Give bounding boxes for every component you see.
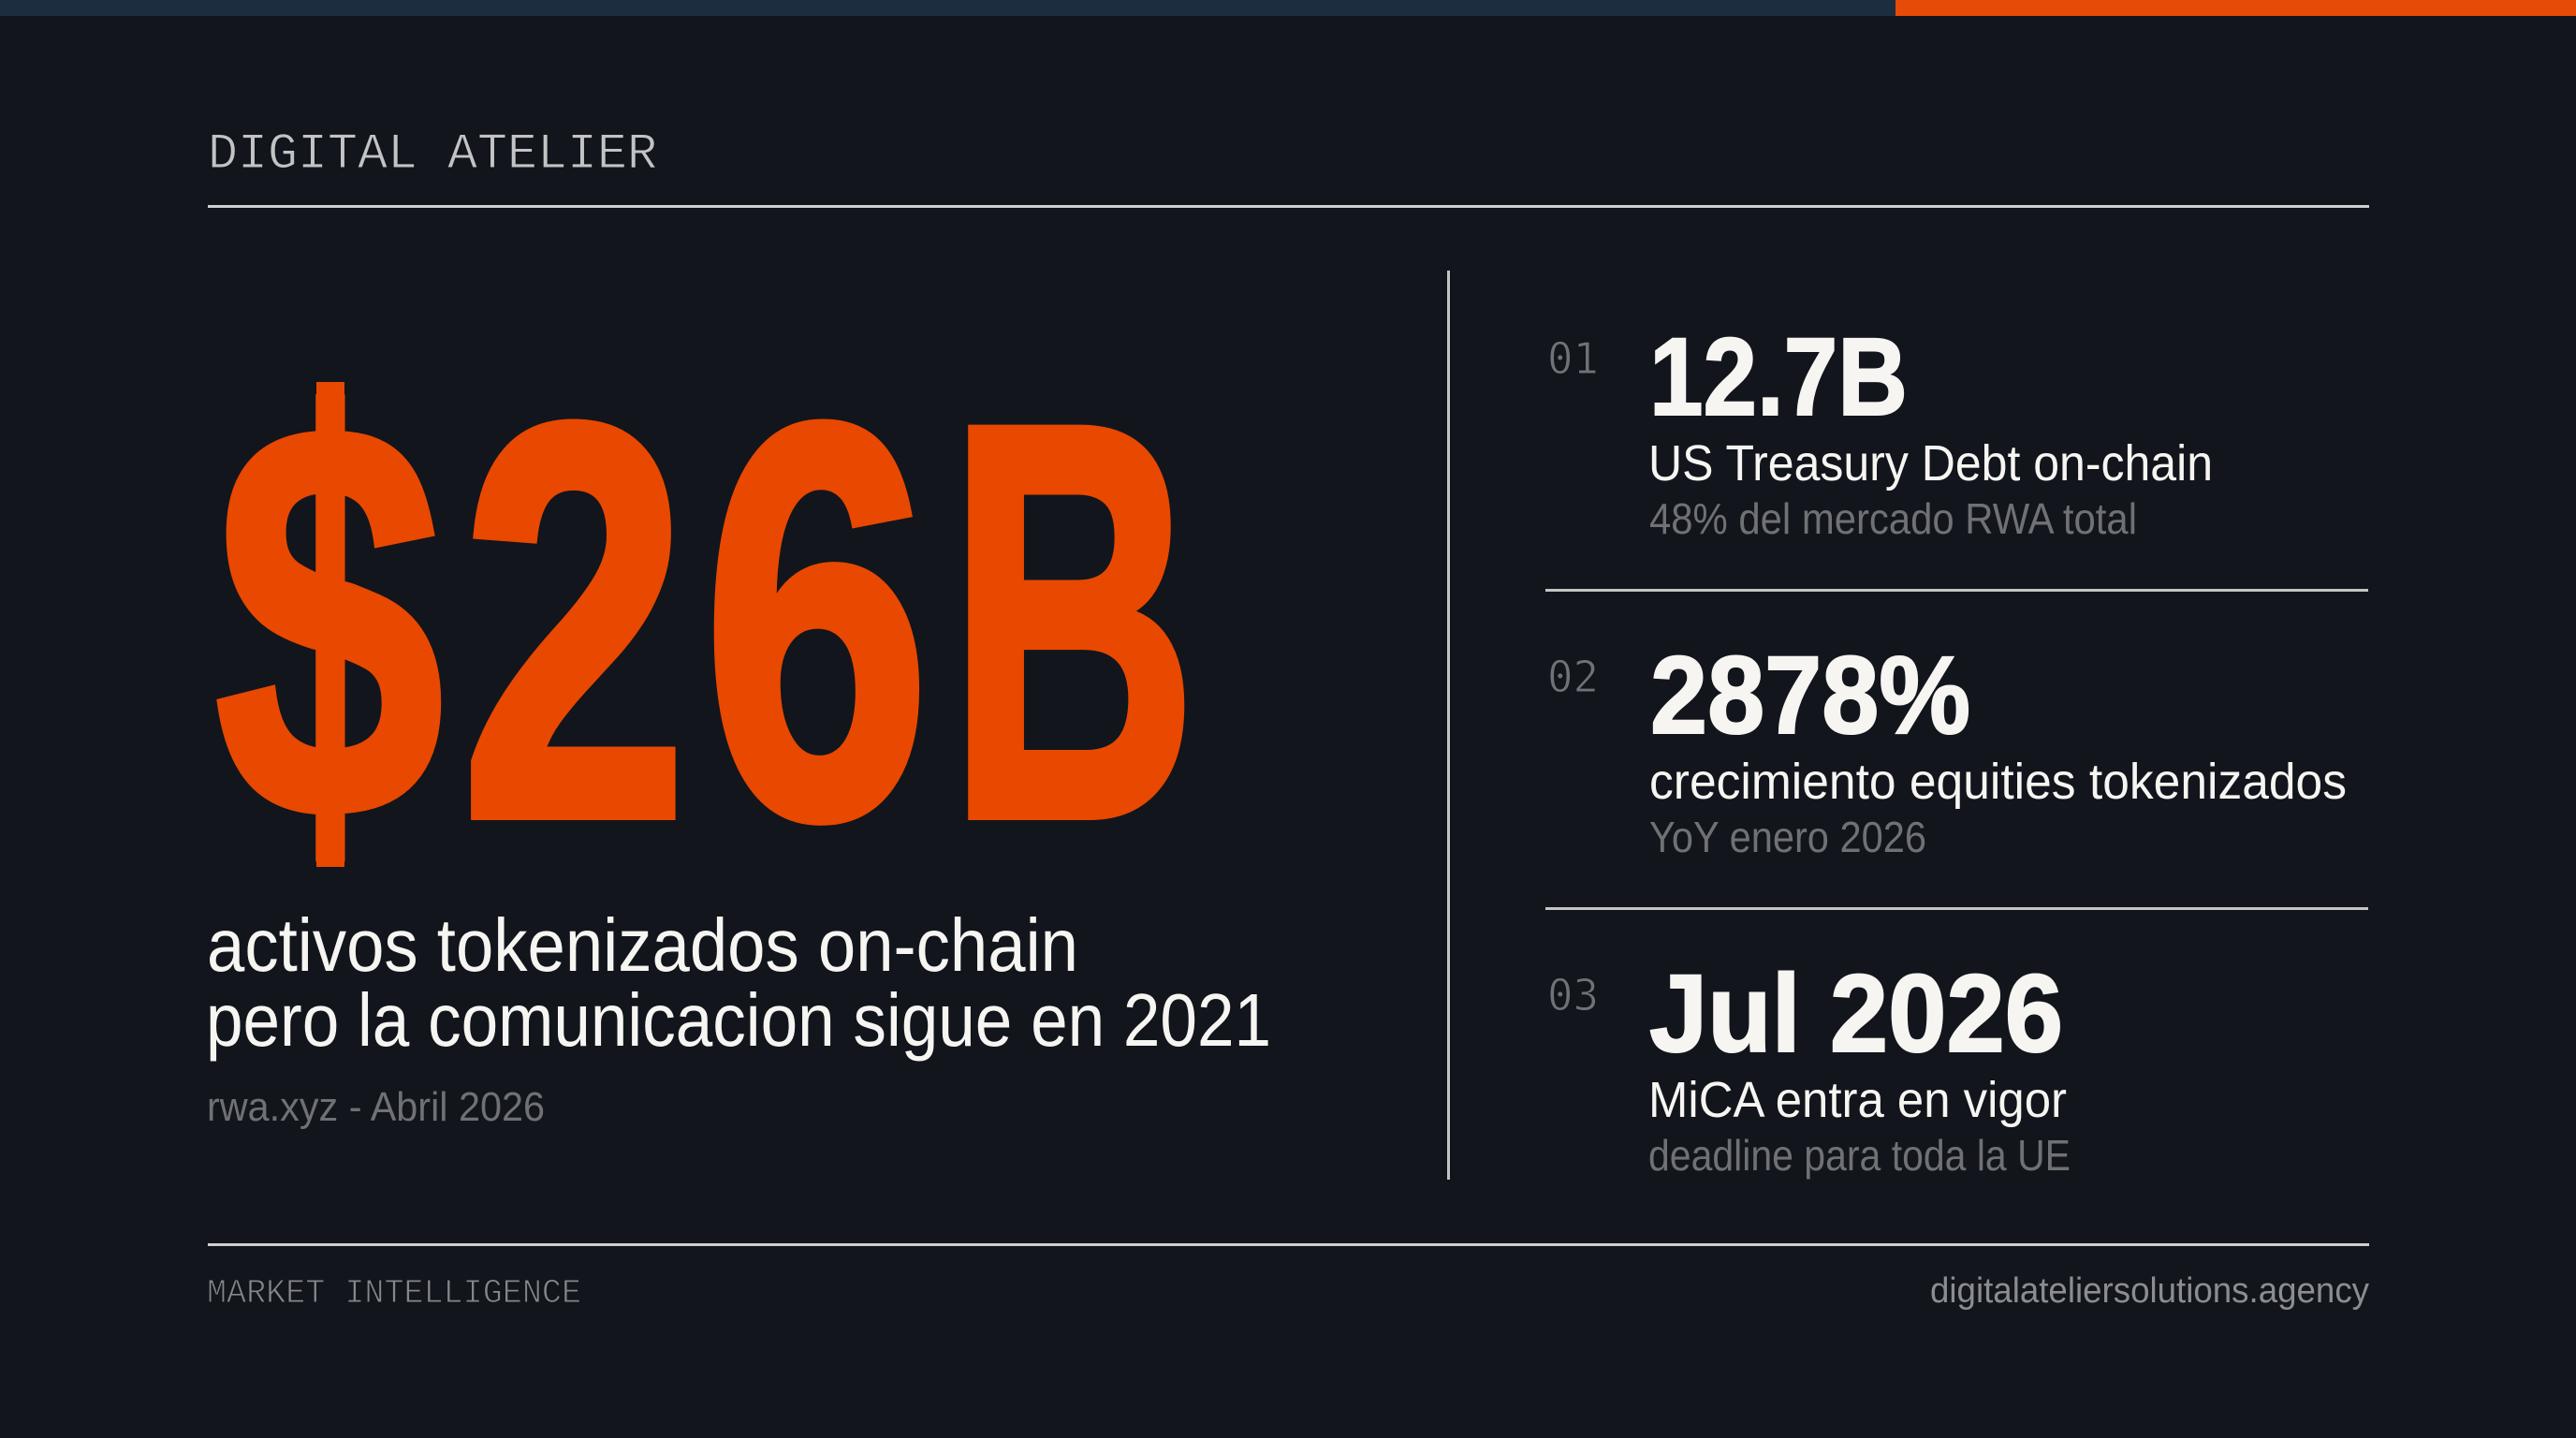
- sublabel: 48% del mercado RWA total: [1649, 494, 2137, 543]
- source note: rwa.xyz - Abril 2026: [207, 1084, 545, 1130]
- panel: stat 02: [1547, 634, 2347, 861]
- value 2878%: 2878%: [1650, 634, 1970, 757]
- headline: [206, 903, 1271, 1062]
- value 12.7B: 12.7B: [1649, 315, 1908, 439]
- label: crecimiento equities tokenizados: [1649, 754, 2347, 810]
- label: MiCA entra en vigor: [1648, 1072, 2067, 1128]
- big number $26B: $26: [215, 308, 930, 933]
- sublabel: deadline para toda la UE: [1648, 1131, 2071, 1180]
- sublabel: YoY enero 2026: [1649, 813, 1926, 861]
- headline: pero la comunicacion sigue en 2021: [206, 978, 1271, 1062]
- index 03: 03: [1547, 970, 1599, 1020]
- top accent bar: [0, 0, 2576, 16]
- index 01: 01: [1547, 333, 1599, 384]
- panel: main figure: [206, 308, 1271, 1130]
- big number $26B: B: [948, 310, 1197, 934]
- panel: stat 03: [1547, 952, 2071, 1180]
- footer left label: MARKET INTELLIGENCE: [207, 1274, 581, 1313]
- panel: stat 01: [1547, 315, 2213, 543]
- footer website: digitalateliersolutions.agency: [1930, 1271, 2369, 1311]
- headline: activos tokenizados on-chain: [207, 903, 1078, 987]
- label: US Treasury Debt on-chain: [1648, 435, 2213, 492]
- value Jul 2026: Jul 2026: [1649, 952, 2063, 1076]
- header brand label: DIGITAL ATELIER: [208, 126, 657, 183]
- index 02: 02: [1547, 652, 1599, 702]
